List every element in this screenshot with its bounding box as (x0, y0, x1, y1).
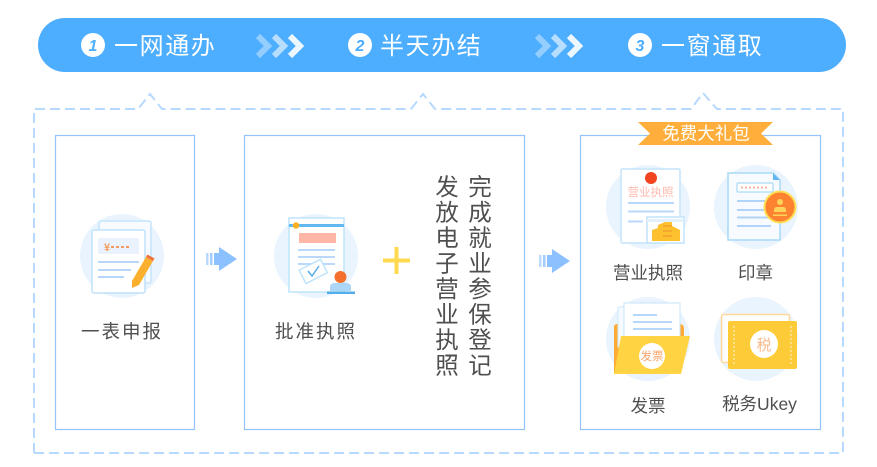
icon: form with pencil: ¥ (104, 242, 111, 254)
panel: 免费大礼包: 营业执照 (613, 263, 683, 283)
vertical text: 完成就业参保登记: 业 (468, 250, 492, 276)
icon: tax ukey (714, 297, 798, 381)
step 1: 一网通办: 1 (89, 38, 98, 55)
icon: invoice folder (606, 297, 690, 381)
panel: 批准执照 + 发放电子营业执照 (244, 136, 524, 430)
icon: business licence (606, 165, 690, 249)
ribbon: 免费大礼包 (638, 122, 773, 145)
chevrons 1 to 2 (258, 36, 300, 56)
panel: 免费大礼包: 发票 (630, 396, 666, 416)
vertical text: 发放电子营业执照: 业 (435, 302, 459, 328)
step 2: 半天办结: 半天办结 (380, 33, 482, 60)
icon: tax ukey: 税 (756, 337, 772, 354)
plus sign (383, 247, 410, 274)
step 2: 半天办结: 2 (355, 38, 365, 55)
header bar (38, 18, 846, 72)
vertical text: 发放电子营业执照: 放 (435, 200, 459, 226)
arrow 2 (539, 249, 570, 273)
icon: invoice folder: 发票 (640, 349, 664, 363)
vertical text: 完成就业参保登记: 参 (468, 276, 492, 302)
ribbon: 免费大礼包: 免费大礼包 (662, 124, 750, 144)
icon: approved document with stamp (274, 214, 358, 298)
step 1: 一网通办: 一网通办 (114, 33, 216, 60)
step 3: 一窗通取: 一窗通取 (661, 33, 763, 60)
vertical text: 完成就业参保登记: 就 (468, 225, 492, 251)
step 3: 一窗通取: 3 (636, 38, 645, 55)
panel: 批准执照 + 发放电子营业执照: 批准执照 (275, 321, 357, 342)
arrow 1 (206, 247, 237, 271)
vertical text: 发放电子营业执照: 照 (435, 352, 459, 378)
vertical text: 发放电子营业执照: 发 (435, 174, 459, 200)
vertical text: 发放电子营业执照: 营 (435, 276, 459, 302)
vertical text: 发放电子营业执照: 电 (435, 225, 459, 251)
panel: 一表申报: 一表申报 (81, 321, 163, 342)
icon: business licence: 营业执照 (628, 185, 674, 199)
vertical text: 完成就业参保登记: 成 (468, 200, 492, 226)
icon: seal on document (714, 165, 798, 249)
icon: form with pencil (80, 214, 164, 298)
panel: 免费大礼包 (580, 122, 820, 430)
chevrons 2 to 3 (537, 36, 579, 56)
panel: 免费大礼包: 税务Ukey (722, 394, 797, 414)
vertical text: 发放电子营业执照: 执 (435, 327, 459, 353)
vertical text: 发放电子营业执照: 子 (435, 250, 459, 276)
panel: 免费大礼包: 印章 (738, 263, 773, 283)
vertical text: 完成就业参保登记: 登 (468, 327, 492, 353)
vertical text: 完成就业参保登记: 记 (468, 352, 492, 378)
vertical text: 完成就业参保登记: 完 (468, 174, 492, 200)
dashed outer frame with notches (34, 93, 843, 453)
panel: 一表申报 (56, 136, 194, 430)
vertical text: 完成就业参保登记: 保 (468, 302, 492, 328)
